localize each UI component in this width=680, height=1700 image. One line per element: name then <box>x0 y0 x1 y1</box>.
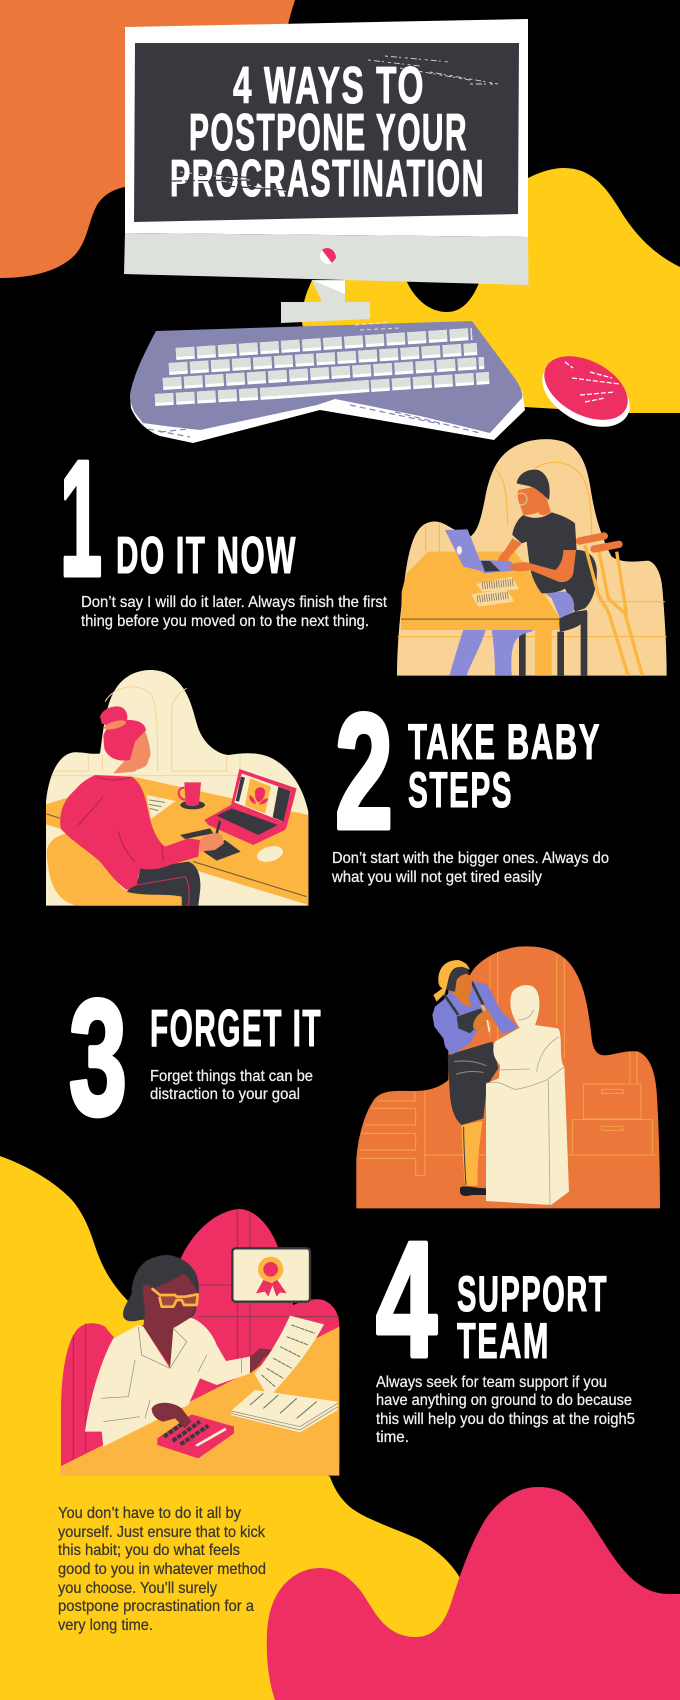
step 3 number: 3 <box>69 966 127 1149</box>
step 3 heading: FORGET IT <box>150 1000 322 1058</box>
closing text <box>58 1505 266 1634</box>
shirt <box>512 512 577 593</box>
mug <box>179 782 205 809</box>
crutches <box>585 545 642 676</box>
chair <box>519 550 597 676</box>
text: 1 <box>60 427 102 610</box>
hair <box>123 1255 199 1322</box>
table <box>401 552 559 630</box>
step 4 text <box>376 1374 635 1446</box>
desk <box>46 777 308 905</box>
step 4 number: 4 <box>376 1208 437 1391</box>
papers <box>476 577 519 592</box>
step 2 text: what you will not get tired easily <box>331 869 542 886</box>
face and neck <box>142 1273 198 1368</box>
step 3 text: distraction to your goal <box>150 1086 300 1103</box>
illustration: person with laptop and crutches <box>397 439 667 676</box>
peach backdrop <box>397 439 667 676</box>
step 3 text: Forget things that can be <box>150 1068 313 1085</box>
statue <box>486 1067 569 1205</box>
illustration: sculptor with statue <box>356 946 660 1208</box>
step 4 text: time. <box>376 1429 409 1446</box>
face and neck <box>113 730 150 773</box>
hand and chisel <box>473 1010 491 1030</box>
step 2 heading <box>408 714 601 818</box>
shirt <box>432 982 518 1055</box>
closing text: postpone procrastination for a <box>58 1598 254 1615</box>
title: 4 WAYS TO <box>233 57 425 115</box>
keyboard keys <box>155 332 489 400</box>
step 1 heading: DO IT NOW <box>116 527 297 585</box>
monitor chin <box>124 233 528 285</box>
cream backdrop <box>46 670 308 906</box>
paper stack <box>231 1390 338 1432</box>
closing text: you choose. You’ll surely <box>58 1580 217 1597</box>
title <box>170 57 485 208</box>
paper on desk <box>147 795 176 819</box>
face <box>448 973 472 1008</box>
shoe <box>460 1186 487 1196</box>
closing text: yourself. Just ensure that to kick <box>58 1524 266 1541</box>
step 4 text: Always seek for team support if you <box>376 1374 607 1391</box>
illustration: designer at laptop <box>46 670 308 906</box>
step 4 text: have anything on ground to do because <box>376 1392 632 1409</box>
paper being read <box>254 1316 324 1398</box>
orange backdrop <box>356 946 660 1208</box>
monitor screen <box>134 43 519 222</box>
desk <box>60 1327 339 1476</box>
framed certificate <box>232 1248 310 1302</box>
keypad and tablet <box>180 828 213 839</box>
keyboard <box>130 321 525 443</box>
step 4 text: this will help you do things at the roigh5 <box>376 1411 635 1428</box>
laptop <box>204 769 297 845</box>
keyboard body <box>130 321 522 433</box>
shirt <box>85 1318 250 1447</box>
yellow blob bottom left <box>0 1156 460 1700</box>
apron bib <box>457 1008 487 1033</box>
closing text: this habit; you do what feels <box>58 1542 240 1559</box>
legs <box>127 862 200 906</box>
calculator <box>157 1414 234 1458</box>
monitor <box>124 19 528 323</box>
leg <box>462 1121 482 1186</box>
monitor stand <box>281 280 370 323</box>
step 2 heading: STEPS <box>408 762 513 818</box>
closing text: You don’t have to do it all by <box>58 1505 241 1522</box>
illustration: accountant with calculator <box>60 1209 339 1476</box>
step 2 number: 2 <box>335 680 393 863</box>
laptop <box>445 529 484 572</box>
hand on calculator <box>152 1403 192 1428</box>
closing text: good to you in whatever method <box>58 1561 266 1578</box>
step 2 text <box>331 850 609 886</box>
hand and pen <box>200 833 224 852</box>
head <box>518 485 551 515</box>
step 2 text: Don’t start with the bigger ones. Always do <box>332 850 609 867</box>
headscarf <box>433 960 470 1002</box>
hand on paper <box>250 1348 275 1373</box>
keyboard base highlight <box>130 390 525 443</box>
hair <box>446 965 470 992</box>
step 1 text: thing before you moved on to the next thing. <box>81 613 369 630</box>
monitor frame <box>125 19 528 237</box>
arms <box>498 538 576 582</box>
closing text: very long time. <box>58 1617 153 1634</box>
pink blob bottom right <box>267 1487 680 1700</box>
hand over keyboard <box>508 562 530 571</box>
sweater <box>60 775 200 890</box>
chair <box>47 833 182 906</box>
yellow blob behind monitor <box>302 168 680 413</box>
step 4 heading <box>457 1266 608 1369</box>
power button <box>320 248 336 264</box>
pink backdrop <box>61 1209 339 1467</box>
apron <box>448 1042 498 1125</box>
mouse <box>531 343 641 441</box>
glasses <box>152 1288 198 1307</box>
orange blob top left <box>0 0 295 278</box>
jeans <box>449 592 574 676</box>
hair <box>103 720 146 761</box>
step 3 text <box>150 1068 313 1103</box>
step 1 text <box>81 594 388 630</box>
desk mouse <box>255 843 285 865</box>
step 4 heading: TEAM <box>457 1313 550 1369</box>
step 1 text: Don’t say I will do it later. Always finish the first <box>81 594 388 611</box>
title: POSTPONE YOUR <box>189 104 468 162</box>
